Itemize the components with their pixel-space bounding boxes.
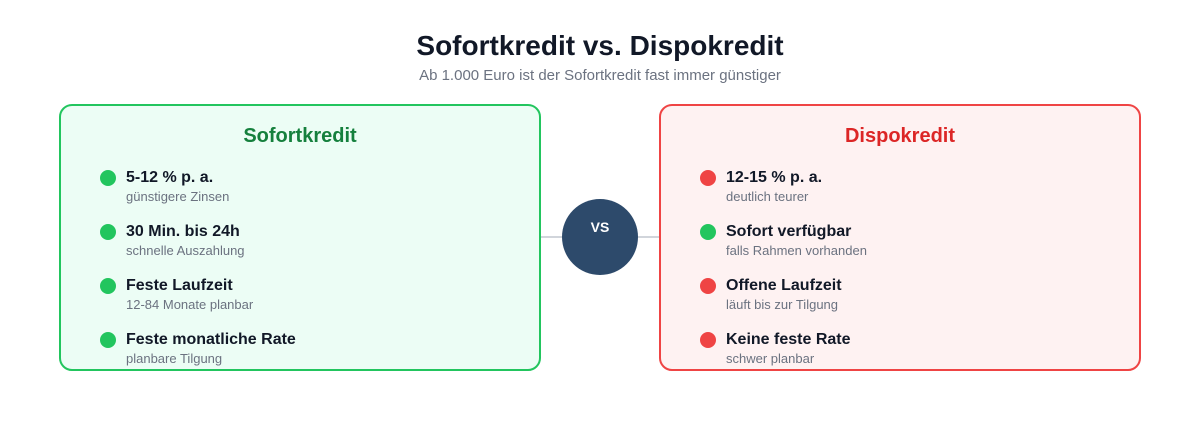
item: Rate <box>100 331 296 366</box>
item: Rate <box>700 331 851 366</box>
title: Sofortkredit vs. Dispokredit <box>416 30 784 61</box>
VS badge <box>562 199 638 275</box>
item: Rate: schwer planbar <box>726 351 815 366</box>
item: Zinsen: 12-15 % p. a. <box>726 169 822 186</box>
panel: Dispokredit <box>660 105 1140 370</box>
item: Laufzeit <box>100 277 254 312</box>
item: Rate: planbare Tilgung <box>126 351 222 366</box>
item: Verfügbarkeit: falls Rahmen vorhanden <box>726 243 867 258</box>
subtitle: Ab 1.000 Euro ist der Sofortkredit fast immer günstiger <box>419 67 781 84</box>
item: Auszahlung: 30 Min. bis 24h <box>126 223 240 240</box>
item: Laufzeit: läuft bis zur Tilgung <box>726 297 838 312</box>
item: Laufzeit: Feste Laufzeit <box>126 277 233 294</box>
item: Laufzeit <box>700 277 842 312</box>
item: Zinsen <box>100 169 229 204</box>
item: Rate: Keine feste Rate <box>726 331 851 348</box>
item: Auszahlung: schnelle Auszahlung <box>126 243 245 258</box>
item: Laufzeit: Offene Laufzeit <box>726 277 842 294</box>
panel heading: Sofortkredit: Sofortkredit <box>243 125 357 147</box>
panel: Sofortkredit <box>60 105 540 370</box>
item: Verfügbarkeit: Sofort verfügbar <box>726 223 851 240</box>
panel heading: Dispokredit: Dispokredit <box>845 125 955 147</box>
item: Rate: Feste monatliche Rate <box>126 331 296 348</box>
item: Verfügbarkeit <box>700 223 867 258</box>
item: Zinsen: deutlich teurer <box>726 189 809 204</box>
item: Zinsen: günstigere Zinsen <box>126 189 229 204</box>
item: Auszahlung <box>100 223 245 258</box>
VS badge: VS <box>591 219 609 235</box>
item: Zinsen: 5-12 % p. a. <box>126 169 213 186</box>
item: Zinsen <box>700 169 822 204</box>
item: Laufzeit: 12-84 Monate planbar <box>126 297 254 312</box>
connector line <box>540 236 660 238</box>
